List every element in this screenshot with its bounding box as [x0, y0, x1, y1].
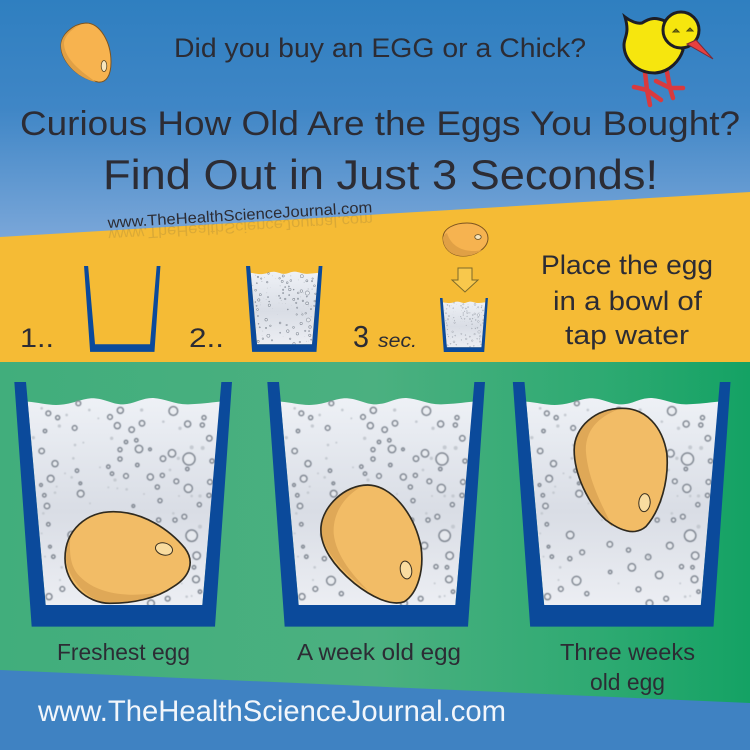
icon: yellow chick: [624, 12, 713, 105]
step label: 3 sec: 3: [353, 319, 369, 354]
instruction text: tap water: [565, 320, 689, 350]
step label: 3 sec: [353, 319, 417, 354]
instruction text: Place the egg: [541, 250, 713, 280]
instruction text: in a bowl of: [553, 286, 703, 316]
icon: empty glass: [84, 266, 160, 352]
footer url: www.TheHealthScienceJournal.com: [37, 695, 506, 728]
band: blue footer: [0, 670, 750, 750]
watermark url: www.TheHealthScienceJournal.com: [107, 210, 373, 243]
heading: curious how old: Curious How Old Are the Eggs You Bought?: [20, 105, 740, 143]
watermark url: [106, 199, 373, 243]
caption: three weeks old egg: Three weeks: [560, 639, 695, 665]
heading: find out in 3 seconds: Find Out in Just 3 Seconds!: [103, 151, 658, 198]
watermark url: www.TheHealthScienceJournal.com: [106, 199, 373, 232]
caption: three weeks old egg: old egg: [590, 669, 665, 695]
icon: small glass with water: [440, 298, 488, 352]
icon: small egg dropping: [443, 223, 488, 256]
step label: 3 sec: sec.: [378, 331, 417, 352]
subtitle: egg or chick question: Did you buy an EGG or a Chick?: [174, 33, 586, 63]
glass 2: week old egg tilted: [267, 382, 485, 627]
background: blue sky gradient: [0, 0, 750, 240]
instruction text: [541, 250, 713, 350]
icon: filled glass: [246, 266, 322, 352]
band: green glasses panel: [0, 362, 750, 707]
step label: 2: 2..: [189, 323, 224, 353]
icon: egg top left: [61, 23, 111, 82]
caption: a week old egg: A week old egg: [297, 639, 461, 665]
caption: three weeks old egg: [560, 639, 695, 695]
glass 1: freshest egg lying flat: [14, 382, 232, 627]
caption: freshest egg: Freshest egg: [57, 639, 190, 665]
icon: down arrow: [452, 268, 478, 292]
band: yellow instructions panel: [0, 192, 750, 363]
step label: 1: 1..: [20, 323, 54, 353]
glass 3: three weeks old egg floating: [513, 382, 730, 627]
